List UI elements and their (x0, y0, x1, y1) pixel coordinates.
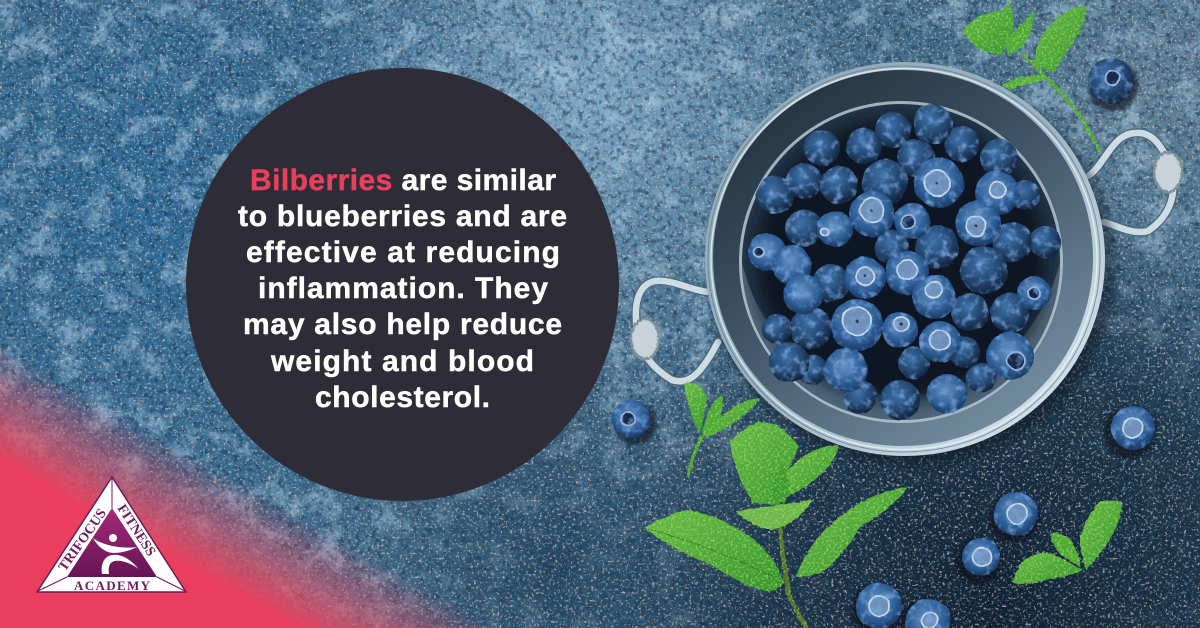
loose blueberries (612, 58, 1156, 628)
mint sprig: small, beside bowl (684, 383, 761, 477)
body text (238, 164, 567, 414)
handle ornament (1154, 152, 1182, 192)
body text: cholesterol. (315, 381, 490, 414)
bowl handle: right (1088, 133, 1182, 232)
logo figure (93, 534, 139, 574)
body text: weight and blood (270, 345, 534, 378)
dark circle panel (186, 68, 619, 501)
body text: inflammation. They (258, 272, 548, 305)
logo wordmark: TRIFOCUS (58, 508, 106, 570)
body text: may also help reduce (243, 308, 562, 341)
mint sprig: lower right (1012, 500, 1122, 584)
body text: effective at reducing (246, 236, 560, 269)
body text: Bilberries are similar (250, 164, 556, 197)
logo wordmark: ACADEMY (74, 578, 151, 593)
berries in bowl: front layer (748, 158, 1051, 414)
logo wordmark: FITNESS (117, 503, 156, 556)
bowl (705, 62, 1116, 466)
logo: Trifocus Fitness Academy (36, 476, 188, 593)
berries in bowl: back layer (756, 104, 1061, 420)
bowl handle: left (631, 281, 718, 381)
mint sprig: top right (963, 1, 1100, 152)
pink diagonal corner band (0, 345, 510, 628)
logo wordmark (58, 503, 156, 593)
body text: to blueberries and are (238, 200, 567, 233)
mint sprig: large, below bowl (645, 422, 908, 628)
handle ornament (631, 319, 659, 359)
